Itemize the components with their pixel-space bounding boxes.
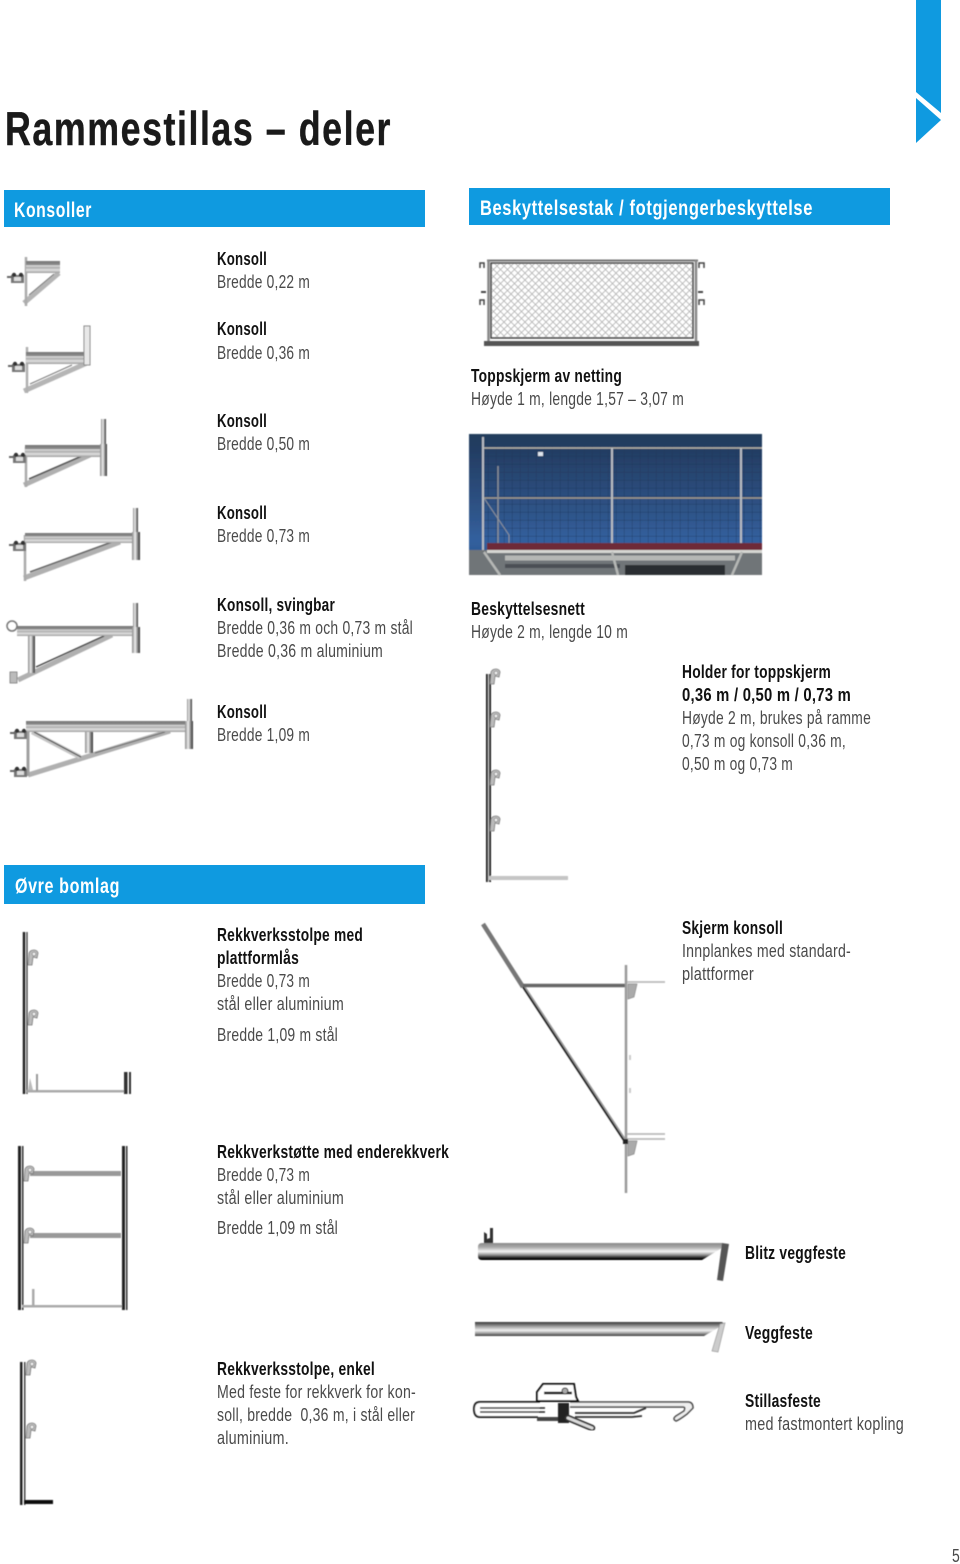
icon: toppskjerm av netting xyxy=(480,260,704,346)
text: toppskjerm av netting: Toppskjerm av netting xyxy=(471,366,622,386)
text: konsoll 0,50 m: Bredde 0,50 m xyxy=(217,434,310,454)
text: rekkverksstolpe enkel: aluminium. xyxy=(217,1428,289,1448)
icon: konsoll 0,73 m xyxy=(9,508,140,581)
text: skjerm konsoll: Innplankes med standard- xyxy=(682,941,851,961)
text: toppskjerm av netting: Høyde 1 m, lengde 1,57 – 3,07 m xyxy=(471,389,684,409)
text: rekkverksstolpe med plattformlås: Bredde 0,73 m xyxy=(217,971,310,991)
text: konsoll svingbar xyxy=(217,595,413,661)
text: rekkverkstøtte med enderekkverk xyxy=(217,1142,450,1238)
text: rekkverksstolpe med plattformlås: Rekkverksstolpe med xyxy=(217,925,363,945)
text: konsoll 1,09 m: Konsoll xyxy=(217,702,267,722)
text: rekkverksstolpe enkel: soll, bredde 0,36 m, i stål eller xyxy=(217,1405,415,1425)
text: rekkverkstøtte med enderekkverk: stål eller aluminium xyxy=(217,1188,344,1208)
icon: veggfeste xyxy=(475,1322,725,1352)
icon: stillasfeste xyxy=(474,1384,693,1428)
text: toppskjerm av netting xyxy=(471,366,684,409)
text: konsoll 0,50 m: Konsoll xyxy=(217,411,267,431)
text: holder for toppskjerm xyxy=(682,662,871,774)
text: konsoll 0,22 m: Bredde 0,22 m xyxy=(217,272,310,292)
text: holder for toppskjerm: 0,73 m og konsoll 0,36 m, xyxy=(682,731,846,751)
text: konsoll 0,73 m: Konsoll xyxy=(217,503,267,523)
text: rekkverkstøtte med enderekkverk: Bredde 0,73 m xyxy=(217,1165,310,1185)
text: rekkverksstolpe med plattformlås: plattformlås xyxy=(217,948,299,968)
text: beskyttelsesnett xyxy=(471,599,628,642)
text: holder for toppskjerm: 0,36 m / 0,50 m / 0,73 m xyxy=(682,685,851,705)
text: holder for toppskjerm: Holder for toppskjerm xyxy=(682,662,831,682)
icon: rekkverkstøtte med enderekkverk xyxy=(18,1146,128,1310)
icon: blitz veggfeste xyxy=(478,1228,729,1281)
text: konsoll 0,36 m: Bredde 0,36 m xyxy=(217,343,310,363)
text: konsoll 0,73 m xyxy=(217,503,310,546)
icon: blue page marker xyxy=(916,0,941,143)
panel heading: Beskyttelsestak: Beskyttelsestak / fotgjengerbeskyttelse xyxy=(480,197,813,220)
text: stillasfeste: med fastmontert kopling xyxy=(745,1414,904,1434)
icon: rekkverksstolpe enkel xyxy=(20,1360,53,1505)
text: skjerm konsoll: Skjerm konsoll xyxy=(682,918,783,938)
icon: konsoll 0,36 m xyxy=(8,326,90,393)
text: konsoll 0,50 m xyxy=(217,411,310,454)
text: konsoll svingbar: Bredde 0,36 m aluminium xyxy=(217,641,383,661)
text: stillasfeste xyxy=(745,1391,904,1434)
text: rekkverksstolpe med plattformlås: Bredde 1,09 m stål xyxy=(217,1025,338,1045)
text: beskyttelsesnett: Beskyttelsesnett xyxy=(471,599,585,619)
text: konsoll 0,36 m: Konsoll xyxy=(217,319,267,339)
text: konsoll 0,36 m xyxy=(217,319,310,363)
icon: konsoll 0,22 m xyxy=(7,257,60,306)
panel heading: Beskyttelsestak xyxy=(469,188,890,225)
text: konsoll 0,22 m: Konsoll xyxy=(217,249,267,269)
icon: konsoll svingbar xyxy=(7,603,140,683)
panel heading: Øvre bomlag xyxy=(4,865,425,904)
text: rekkverksstolpe enkel: Rekkverksstolpe, enkel xyxy=(217,1359,375,1379)
text: holder for toppskjerm: 0,50 m og 0,73 m xyxy=(682,754,793,774)
text: holder for toppskjerm: Høyde 2 m, brukes på ramme xyxy=(682,708,871,728)
text: rekkverksstolpe med plattformlås: stål eller aluminium xyxy=(217,994,344,1014)
text: rekkverkstøtte med enderekkverk: Rekkverkstøtte med enderekkverk xyxy=(217,1142,450,1162)
title: Rammestillas – deler xyxy=(5,102,392,155)
panel heading: Konsoller: Konsoller xyxy=(14,199,92,222)
text: konsoll 1,09 m: Bredde 1,09 m xyxy=(217,725,310,745)
text: konsoll svingbar: Konsoll, svingbar xyxy=(217,595,335,615)
panel heading: Øvre bomlag: Øvre bomlag xyxy=(15,875,120,898)
text: skjerm konsoll xyxy=(682,918,851,984)
text: konsoll svingbar: Bredde 0,36 m och 0,73 m stål xyxy=(217,618,413,638)
photo: beskyttelsesnett xyxy=(469,434,762,575)
text: blitz veggfeste: Blitz veggfeste xyxy=(745,1243,846,1263)
text: rekkverksstolpe enkel: Med feste for rekkverk for kon- xyxy=(217,1382,416,1402)
icon: holder for toppskjerm xyxy=(486,669,568,882)
text: konsoll 0,22 m xyxy=(217,249,310,292)
text: rekkverkstøtte med enderekkverk: Bredde 1,09 m stål xyxy=(217,1218,338,1238)
panel heading: Konsoller xyxy=(4,190,425,227)
icon: rekkverksstolpe med plattformlås xyxy=(24,932,131,1094)
icon: konsoll 0,50 m xyxy=(9,419,107,487)
text: rekkverksstolpe enkel xyxy=(217,1359,416,1448)
text: rekkverksstolpe med plattformlås xyxy=(217,925,363,1045)
text: stillasfeste: Stillasfeste xyxy=(745,1391,821,1411)
text: veggfeste: Veggfeste xyxy=(745,1323,813,1343)
text: konsoll 0,73 m: Bredde 0,73 m xyxy=(217,526,310,546)
text: skjerm konsoll: plattformer xyxy=(682,964,754,984)
icon: skjerm konsoll xyxy=(483,924,665,1193)
text: beskyttelsesnett: Høyde 2 m, lengde 10 m xyxy=(471,622,628,642)
text: konsoll 1,09 m xyxy=(217,702,310,745)
icon: konsoll 1,09 m xyxy=(10,699,193,777)
